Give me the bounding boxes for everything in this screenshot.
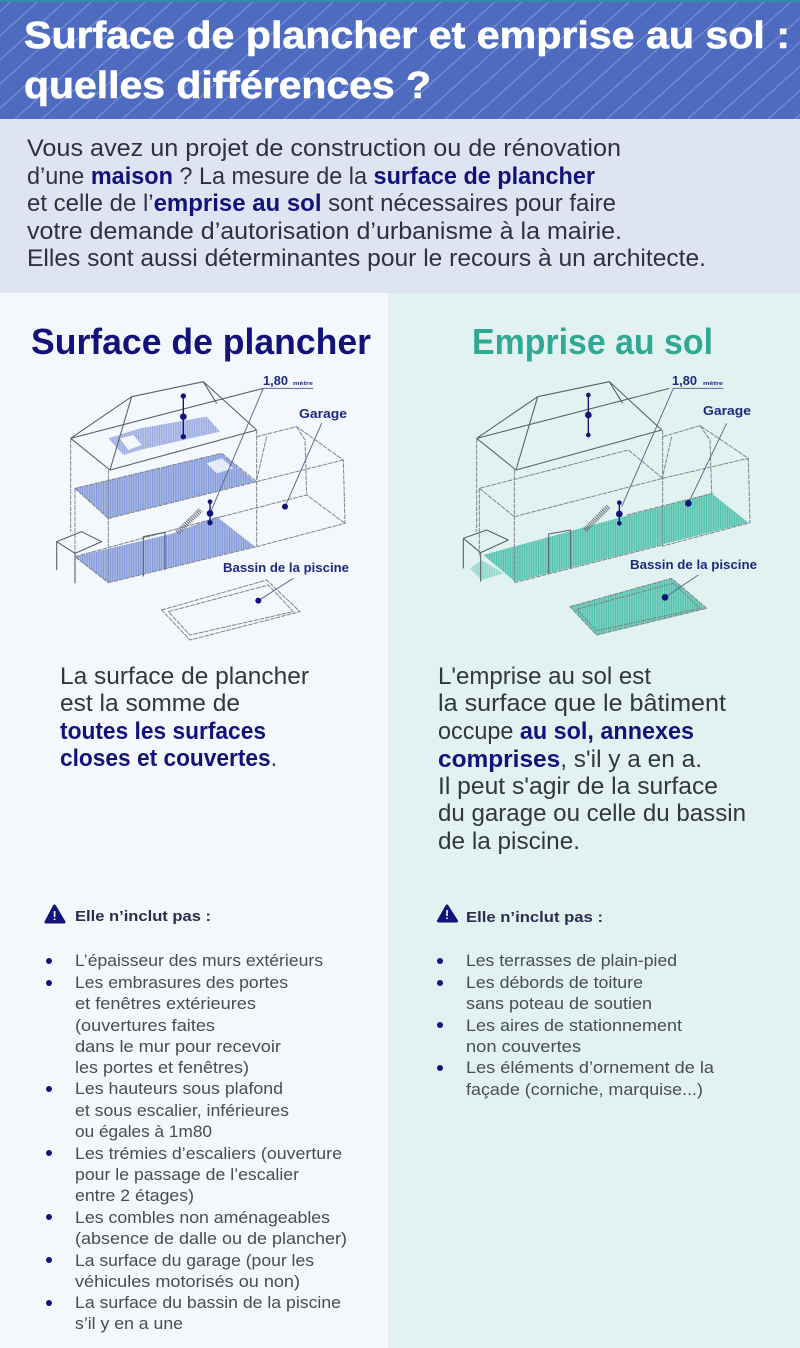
list: exclusions emprise au sol: non couvertes (466, 1037, 581, 1056)
label: garage right: Garage (703, 403, 751, 418)
list: exclusions surface de plancher: et sous escalier, inférieures (75, 1101, 289, 1120)
label: bassin: Bassin de la piscine (223, 560, 349, 575)
definition text right: du garage ou celle du bassin (438, 800, 746, 827)
definition text: La surface de plancher (60, 663, 309, 690)
definition text: est la somme de (60, 690, 240, 717)
list: exclusions surface de plancher (46, 951, 347, 1333)
list: exclusions surface de plancher: Les hauteurs sous plafond (75, 1079, 283, 1098)
intro text: votre demande d’autorisation d’urbanisme à la mairie. (27, 218, 622, 245)
list: exclusions surface de plancher: (absence de dalle ou de plancher) (75, 1229, 347, 1248)
definition text right: L'emprise au sol est (438, 663, 651, 690)
warning heading (46, 906, 211, 925)
label: 1,80 metre right: mètre (703, 381, 723, 387)
intro text: d’une maison ? La mesure de la surface de plancher (27, 163, 595, 190)
warning heading: Elle n’inclut pas : (75, 908, 211, 925)
panel: surface de plancher (0, 293, 388, 1348)
label: 1,80 metre (263, 373, 313, 388)
icon: warning right (438, 906, 456, 921)
label: garage: Garage (299, 406, 347, 421)
intro text: Elles sont aussi déterminantes pour le recours à un architecte. (27, 245, 706, 272)
list: exclusions surface de plancher: Les trémies d’escaliers (ouverture (75, 1144, 342, 1163)
list: exclusions surface de plancher: véhicules motorisés ou non) (75, 1272, 300, 1291)
definition text right: la surface que le bâtiment (438, 690, 726, 717)
intro panel (0, 119, 800, 293)
label: bassin right: Bassin de la piscine (630, 557, 757, 572)
definition text (60, 663, 309, 772)
label: 1,80 metre right (672, 373, 723, 388)
list: exclusions surface de plancher: les portes et fenêtres) (75, 1058, 249, 1077)
list: exclusions emprise au sol: Les terrasses de plain-pied (466, 951, 677, 970)
list: exclusions surface de plancher: La surface du garage (pour les (75, 1251, 314, 1270)
illustration: house footprint (463, 373, 757, 635)
list: exclusions surface de plancher: pour le passage de l’escalier (75, 1165, 299, 1184)
definition text right: de la piscine. (438, 828, 580, 855)
header band (0, 0, 800, 119)
definition text right: comprises, s'il y a en a. (438, 746, 702, 773)
title (24, 15, 790, 107)
intro text: et celle de l’emprise au sol sont nécessaires pour faire (27, 190, 616, 217)
list: exclusions surface de plancher: s’il y en a une (75, 1314, 183, 1333)
intro text: Vous avez un projet de construction ou de rénovation (27, 135, 621, 162)
definition text right: occupe au sol, annexes (438, 718, 694, 745)
list: exclusions surface de plancher: La surface du bassin de la piscine (75, 1293, 341, 1312)
panel: emprise au sol (388, 293, 800, 1348)
list: exclusions surface de plancher: Les embrasures des portes (75, 973, 288, 992)
list: exclusions emprise au sol (437, 951, 715, 1099)
definition text: closes et couvertes. (60, 745, 277, 772)
label: 1,80 metre right: 1,80 (672, 373, 697, 388)
list: exclusions surface de plancher: (ouvertures faites (75, 1016, 215, 1035)
definition text: toutes les surfaces (60, 718, 266, 745)
list: exclusions surface de plancher: dans le mur pour recevoir (75, 1037, 281, 1056)
list: exclusions surface de plancher: ou égales à 1m80 (75, 1122, 212, 1141)
list: exclusions emprise au sol: façade (corniche, marquise...) (466, 1080, 703, 1099)
heading: emprise au sol: Emprise au sol (472, 321, 713, 362)
list: exclusions emprise au sol: Les éléments d’ornement de la (466, 1058, 715, 1077)
label: 1,80 metre: 1,80 (263, 373, 288, 388)
illustration: house floor area (57, 373, 349, 640)
list: exclusions surface de plancher: Les combles non aménageables (75, 1208, 330, 1227)
title: quelles différences ? (24, 65, 431, 107)
icon: warning (46, 906, 64, 922)
warning heading right (438, 906, 603, 926)
intro text (27, 135, 706, 272)
heading: surface de plancher: Surface de plancher (31, 321, 371, 362)
definition text right (438, 663, 746, 855)
list: exclusions surface de plancher: et fenêtres extérieures (75, 994, 256, 1013)
list: exclusions surface de plancher: entre 2 étages) (75, 1186, 194, 1205)
list: exclusions emprise au sol: sans poteau de soutien (466, 994, 652, 1013)
label: 1,80 metre: mètre (293, 381, 313, 387)
list: exclusions surface de plancher: L’épaisseur des murs extérieurs (75, 951, 323, 970)
list: exclusions emprise au sol: Les aires de stationnement (466, 1016, 682, 1035)
warning heading right: Elle n’inclut pas : (466, 909, 603, 926)
title: Surface de plancher et emprise au sol : (24, 15, 790, 57)
list: exclusions emprise au sol: Les débords de toiture (466, 973, 643, 992)
definition text right: Il peut s'agir de la surface (438, 773, 718, 800)
